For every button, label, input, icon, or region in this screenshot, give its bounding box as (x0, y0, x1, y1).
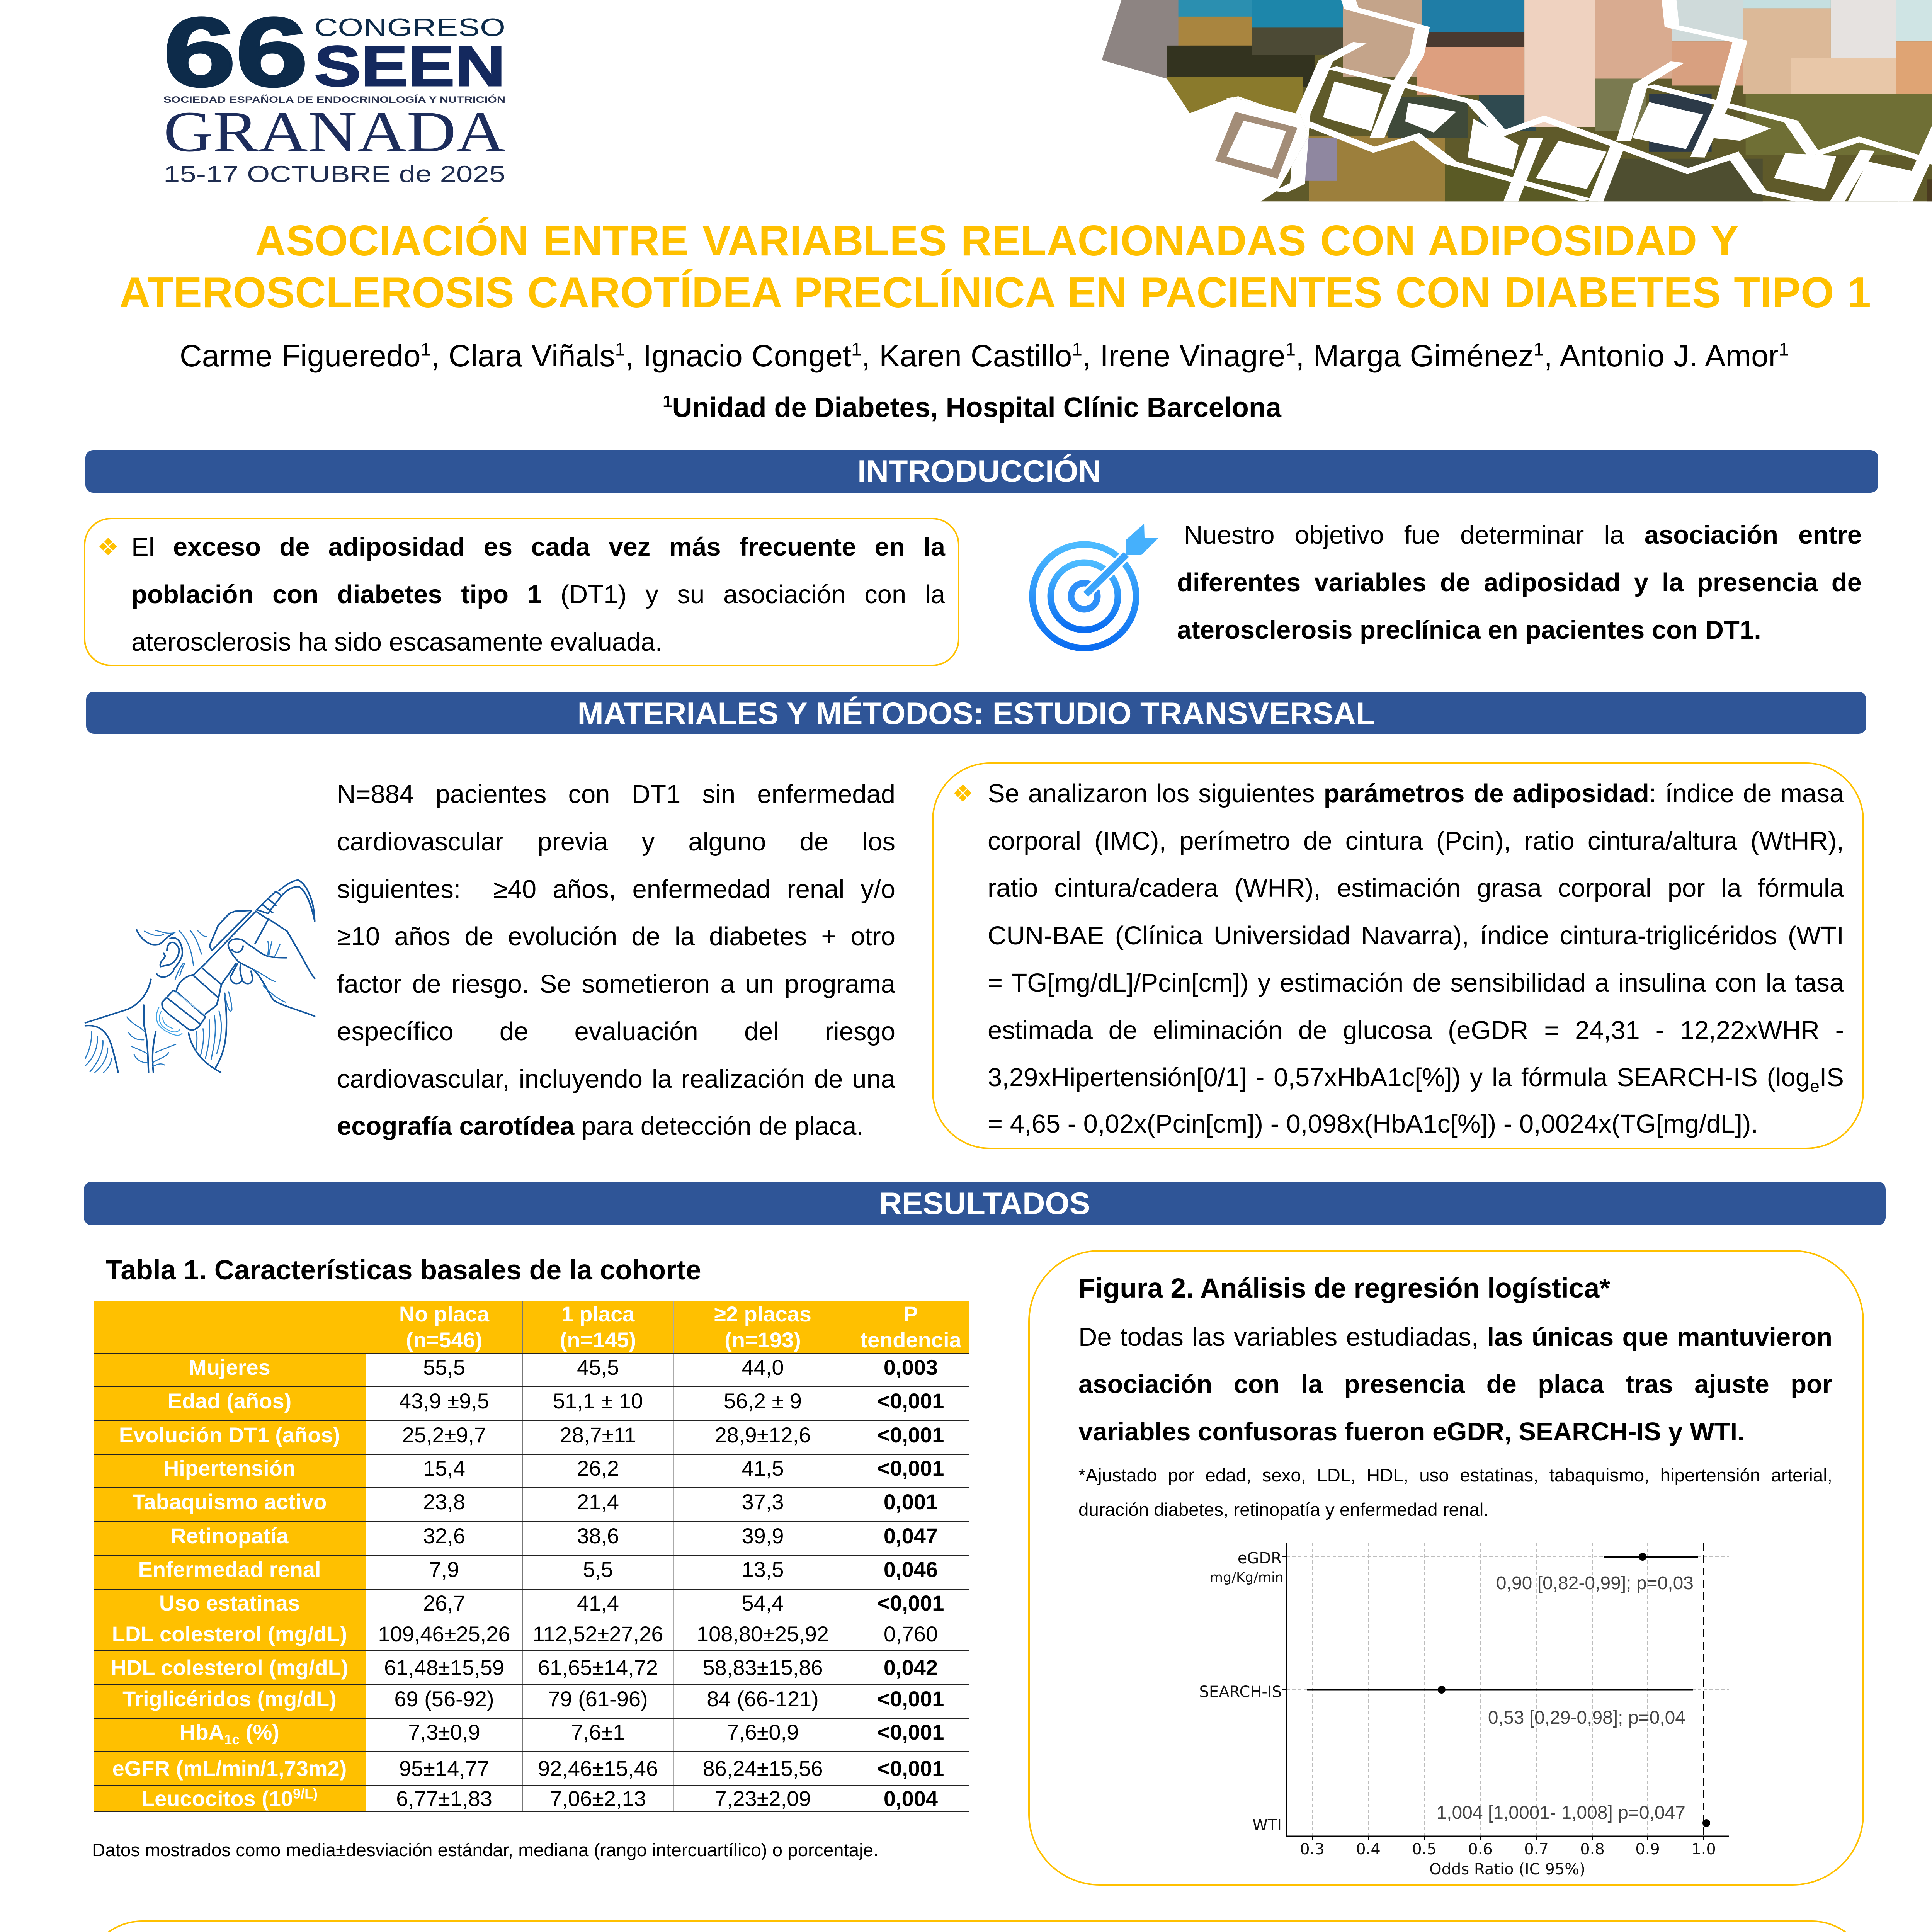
table: baseline characteristics: <0,001 (878, 1686, 944, 1711)
heading: materiales y métodos (86, 692, 1866, 734)
table: baseline characteristics: 37,3 (742, 1490, 784, 1514)
objective text (1177, 522, 1862, 646)
table: baseline characteristics: 7,3±0,9 (408, 1720, 480, 1744)
table: baseline characteristics: 23,8 (423, 1490, 465, 1514)
heading: introducción (85, 450, 1878, 493)
table: baseline characteristics: <0,001 (878, 1423, 944, 1447)
table: baseline characteristics: Uso estatinas (159, 1591, 300, 1615)
parameters paragraph: = TG[mg/dL]/Pcin[cm]) y estimación de sensibilidad a insulina con la tasa (988, 968, 1844, 997)
figure 2 title: Figura 2. Análisis de regresión logística* (1078, 1273, 1610, 1304)
methods text: cohort: factor de riesgo. Se sometieron a un programa (337, 969, 895, 998)
table: baseline characteristics: LDL colesterol (mg/dL) (112, 1621, 347, 1646)
banner: Granada collage with white geometric pattern (1082, 0, 1932, 216)
methods text: cohort: ecografía carotídea para detección de placa. (337, 1112, 864, 1141)
table: baseline characteristics: 108,80±25,92 (697, 1621, 829, 1646)
title: ATEROSCLEROSIS CAROTÍDEA PRECLÍNICA EN PACIENTES CON DIABETES TIPO 1 (119, 269, 1871, 316)
parameters paragraph: 3,29xHipertensión[0/1] - 0,57xHbA1c[%]) y la fórmula SEARCH-IS (logeIS (988, 1063, 1844, 1095)
SEARCH-IS estimate: 0,53 [0,29-0,98]; p=0,04 (1488, 1708, 1685, 1728)
parameters paragraph (988, 781, 1844, 1136)
table: baseline characteristics: <0,001 (878, 1389, 944, 1413)
table: baseline characteristics: <0,001 (878, 1756, 944, 1781)
table: baseline characteristics: Evolución DT1 (años) (119, 1423, 340, 1447)
table: baseline characteristics: 39,9 (742, 1523, 784, 1548)
forest plot axis labels: 0.7 (1524, 1840, 1549, 1858)
table: baseline characteristics: 5,5 (583, 1557, 613, 1582)
table: baseline characteristics: <0,001 (878, 1591, 944, 1615)
logo: 66 Congreso SEEN Granada (155, 12, 514, 189)
table: baseline characteristics: 0,001 (884, 1490, 938, 1514)
table: baseline characteristics: 56,2 ± 9 (724, 1389, 802, 1413)
eGDR estimate: 0,90 [0,82-0,99]; p=0,03 (1496, 1573, 1694, 1594)
figure 2 adjustment note (1078, 1466, 1832, 1524)
table: baseline characteristics: No placa (399, 1302, 489, 1326)
table: baseline characteristics: 6,77±1,83 (396, 1786, 492, 1811)
methods text: cohort (337, 781, 895, 1141)
table: baseline characteristics: 1 placa (561, 1302, 634, 1326)
table: baseline characteristics: Retinopatía (171, 1523, 288, 1548)
methods text: cohort: N=884 pacientes con DT1 sin enfermedad (337, 780, 895, 809)
authors: Carme Figueredo1, Clara Viñals1, Ignacio Conget1, Karen Castillo1, Irene Vinagre1, Marga Giménez1, Antonio J. Amor1 (180, 338, 1789, 373)
table: baseline characteristics: HbA1c (%) (180, 1720, 279, 1747)
table: baseline characteristics: <0,001 (878, 1456, 944, 1480)
white pattern strokes (1232, 0, 1932, 203)
figure 2 adjustment note: *Ajustado por edad, sexo, LDL, HDL, uso estatinas, tabaquismo, hipertensión arterial, (1078, 1465, 1832, 1486)
methods text: cohort: ≥10 años de evolución de la diabetes + otro (337, 922, 895, 951)
table: baseline characteristics: 43,9 ±9,5 (399, 1389, 489, 1413)
table: baseline characteristics: P (903, 1302, 918, 1326)
table: baseline characteristics: 55,5 (423, 1355, 465, 1379)
table: baseline characteristics: HDL colesterol (mg/dL) (111, 1655, 349, 1680)
objective text: diferentes variables de adiposidad y la presencia de (1177, 568, 1862, 597)
forest plot axis labels (1199, 1549, 1716, 1878)
intro paragraph (131, 534, 945, 658)
table: baseline characteristics: 0,003 (884, 1355, 938, 1379)
heading: resultados (84, 1182, 1886, 1225)
logo: 66 Congreso SEEN Granada: CONGRESO (314, 13, 505, 41)
table: baseline characteristics: 25,2±9,7 (402, 1423, 486, 1447)
parameters paragraph: = 4,65 - 0,02x(Pcin[cm]) - 0,098x(HbA1c[%]) - 0,0024x(TG[mg/dL]). (988, 1109, 1758, 1138)
table: baseline characteristics: 44,0 (742, 1355, 784, 1379)
table: baseline characteristics: 45,5 (577, 1355, 619, 1379)
forest plot (1179, 1530, 1750, 1878)
intro paragraph: aterosclerosis ha sido escasamente evaluada. (131, 628, 662, 656)
panel: figure 2 logistic regression (1028, 1250, 1864, 1886)
logo: 66 Congreso SEEN Granada: SEEN (314, 34, 505, 98)
forest plot axis labels: 0.4 (1356, 1840, 1381, 1858)
table: baseline characteristics: eGFR (mL/min/1,73m2) (112, 1756, 347, 1781)
figure 2 description: De todas las variables estudiadas, las únicas que mantuvieron (1078, 1323, 1832, 1352)
intro paragraph: población con diabetes tipo 1 (DT1) y su asociación con la (131, 580, 945, 609)
table: baseline characteristics: Triglicéridos (mg/dL) (122, 1686, 337, 1711)
parameters paragraph: Se analizaron los siguientes parámetros de adiposidad: índice de masa (988, 779, 1844, 808)
logo: 66 Congreso SEEN Granada: SOCIEDAD ESPAÑOLA DE ENDOCRINOLOGÍA Y NUTRICIÓN (163, 94, 505, 105)
table: baseline characteristics: 26,2 (577, 1456, 619, 1480)
table: baseline characteristics: 112,52±27,26 (532, 1621, 663, 1646)
table: baseline characteristics: 41,5 (742, 1456, 784, 1480)
figure 2 adjustment note: duración diabetes, retinopatía y enfermedad renal. (1078, 1500, 1489, 1520)
eGDR estimate (1496, 1553, 1698, 1594)
table: baseline characteristics: 38,6 (577, 1523, 619, 1548)
parameters paragraph: ratio cintura/cadera (WHR), estimación grasa corporal por la fórmula (988, 874, 1844, 903)
table: baseline characteristics: 69 (56-92) (394, 1686, 494, 1711)
table: baseline characteristics: Tabaquismo activo (132, 1490, 327, 1514)
forest plot axis labels: 0.3 (1300, 1840, 1325, 1858)
table: baseline characteristics: 54,4 (742, 1591, 784, 1615)
figure 1 charts (84, 1920, 1870, 1932)
panel: figure 1 adiposity variables and plaque (84, 1920, 1870, 1932)
forest plot axis labels: WTI (1252, 1816, 1282, 1834)
icon: target with arrow (1024, 518, 1163, 661)
logo: 66 Congreso SEEN Granada: 15-17 OCTUBRE de 2025 (163, 161, 505, 187)
forest plot axis labels: Odds Ratio (IC 95%) (1429, 1861, 1585, 1878)
figure 2 description: asociación con la presencia de placa tras ajuste por (1078, 1370, 1832, 1399)
methods text: cohort: cardiovascular previa y alguno de los (337, 827, 895, 856)
table: baseline characteristics (94, 1301, 969, 1812)
table: baseline characteristics: 58,83±15,86 (702, 1655, 823, 1680)
title (116, 216, 1874, 313)
table: baseline characteristics: 51,1 ± 10 (553, 1389, 643, 1413)
parameters paragraph: estimada de eliminación de glucosa (eGDR = 24,31 - 12,22xWHR - (988, 1016, 1844, 1045)
methods text: cohort: específico de evaluación del riesgo (337, 1017, 895, 1046)
table: baseline characteristics: 0,046 (884, 1557, 938, 1582)
logo: 66 Congreso SEEN Granada: GRANADA (163, 100, 505, 164)
table: baseline characteristics: Leucocitos (109/L) (141, 1786, 318, 1811)
figure 2 description: variables confusoras fueron eGDR, SEARCH-IS y WTI. (1078, 1417, 1745, 1446)
table: baseline characteristics: 84 (66-121) (707, 1686, 819, 1711)
parameters paragraph: CUN-BAE (Clínica Universidad Navarra), índice cintura-triglicéridos (WTI (988, 921, 1844, 950)
methods text: cohort: siguientes: ≥40 años, enfermedad renal y/o (337, 875, 895, 904)
table: baseline characteristics: 92,46±15,46 (538, 1756, 658, 1781)
table: baseline characteristics: 79 (61-96) (548, 1686, 648, 1711)
table: baseline characteristics: 109,46±25,26 (378, 1621, 510, 1646)
table: baseline characteristics: 21,4 (577, 1490, 619, 1514)
table footnote: Datos mostrados como media±desviación estándar, mediana (rango intercuartílico) o porcentaje. (92, 1840, 878, 1861)
table: baseline characteristics: 0,760 (884, 1621, 938, 1646)
table: baseline characteristics: 13,5 (742, 1557, 784, 1582)
forest plot axis labels: mg/Kg/min (1210, 1570, 1284, 1585)
table: baseline characteristics: 61,65±14,72 (538, 1655, 658, 1680)
table: baseline characteristics: <0,001 (878, 1720, 944, 1744)
panel: introduction text (84, 518, 959, 666)
table: baseline characteristics: Hipertensión (163, 1456, 296, 1480)
objective text: aterosclerosis preclínica en pacientes con DT1. (1177, 616, 1761, 645)
table: baseline characteristics: Mujeres (189, 1355, 270, 1379)
table: baseline characteristics: 41,4 (577, 1591, 619, 1615)
figure 2 description (1078, 1324, 1832, 1448)
forest plot axis labels: 0.8 (1580, 1840, 1605, 1858)
forest plot axis labels: 1.0 (1691, 1840, 1716, 1858)
forest plot axis labels: 0.5 (1412, 1840, 1437, 1858)
WTI estimate: 1,004 [1,0001- 1,008] p=0,047 (1436, 1803, 1685, 1823)
bullet icon: ❖ (952, 779, 974, 808)
table: baseline characteristics: (n=193) (724, 1328, 801, 1352)
objective text: Nuestro objetivo fue determinar la asociación entre (1184, 520, 1862, 549)
table: baseline characteristics: Edad (años) (168, 1389, 291, 1413)
heading: resultados: RESULTADOS (879, 1186, 1090, 1221)
intro paragraph: El exceso de adiposidad es cada vez más frecuente en la (131, 532, 945, 561)
table: baseline characteristics: 7,9 (429, 1557, 459, 1582)
table: baseline characteristics: (n=546) (406, 1328, 482, 1352)
table: baseline characteristics: 61,48±15,59 (384, 1655, 504, 1680)
SEARCH-IS estimate (1307, 1686, 1693, 1728)
forest plot axis labels: 0.6 (1468, 1840, 1493, 1858)
table: baseline characteristics: 7,06±2,13 (550, 1786, 646, 1811)
table title: Tabla 1. Características basales de la cohorte (106, 1255, 701, 1286)
table: baseline characteristics: 0,047 (884, 1523, 938, 1548)
heading: materiales y métodos: MATERIALES Y MÉTODOS: ESTUDIO TRANSVERSAL (577, 696, 1375, 731)
white interior windows (1323, 82, 1383, 131)
table: baseline characteristics: 28,7±11 (560, 1423, 636, 1447)
table: baseline characteristics: 28,9±12,6 (715, 1423, 811, 1447)
forest plot axis labels: eGDR (1238, 1549, 1282, 1567)
table: baseline characteristics: Enfermedad renal (138, 1557, 321, 1582)
bullet icon: ❖ (97, 533, 119, 561)
table: baseline characteristics: 26,7 (423, 1591, 465, 1615)
forest plot axis labels: 0.9 (1635, 1840, 1660, 1858)
methods text: cohort: cardiovascular, incluyendo la realización de una (337, 1065, 895, 1094)
table: baseline characteristics: (n=145) (560, 1328, 636, 1352)
table: baseline characteristics: 0,004 (884, 1786, 938, 1811)
table: baseline characteristics: 7,6±1 (571, 1720, 625, 1744)
affiliation: 1Unidad de Diabetes, Hospital Clínic Barcelona (663, 392, 1281, 423)
forest plot axis labels: SEARCH-IS (1199, 1683, 1282, 1701)
table: baseline characteristics: 0,042 (884, 1655, 938, 1680)
table: baseline characteristics: 15,4 (423, 1456, 465, 1480)
parameters paragraph: corporal (IMC), perímetro de cintura (Pcin), ratio cintura/altura (WtHR), (988, 827, 1844, 855)
table: baseline characteristics: 32,6 (423, 1523, 465, 1548)
table: baseline characteristics: 7,6±0,9 (727, 1720, 799, 1744)
table: baseline characteristics: ≥2 placas (714, 1302, 811, 1326)
title: ASOCIACIÓN ENTRE VARIABLES RELACIONADAS CON ADIPOSIDAD Y (255, 217, 1739, 265)
panel: adiposity parameters (932, 762, 1864, 1149)
table: baseline characteristics: 86,24±15,56 (702, 1756, 823, 1781)
illustration: carotid ultrasound probe on neck (77, 862, 328, 1094)
table: baseline characteristics: tendencia (860, 1328, 961, 1352)
table: baseline characteristics: 95±14,77 (399, 1756, 489, 1781)
heading: introducción: INTRODUCCIÓN (857, 454, 1101, 489)
table: baseline characteristics: 7,23±2,09 (715, 1786, 811, 1811)
